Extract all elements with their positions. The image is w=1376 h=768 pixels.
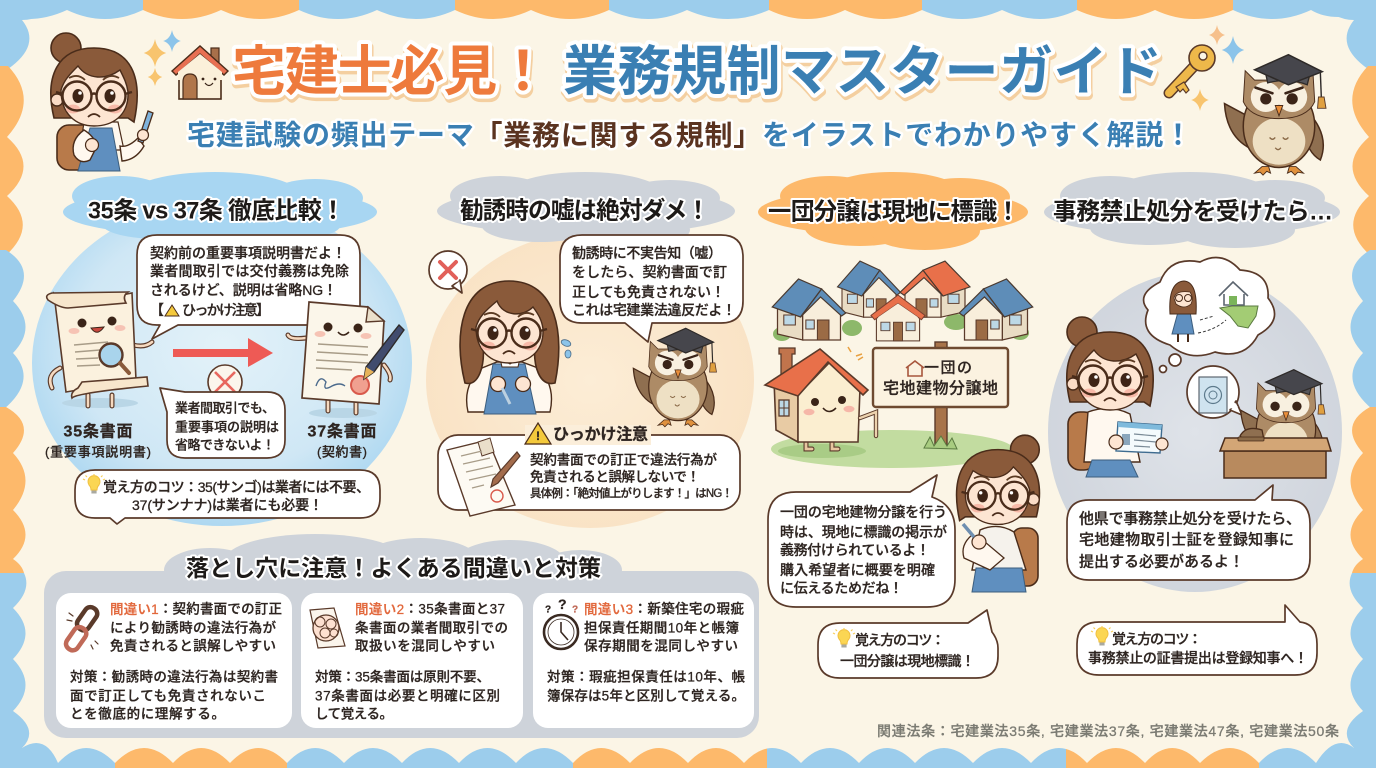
sign: 一団の宅地建物分譲地: 一団の: [924, 360, 972, 376]
card: 間違い2: 取扱いを混同しやすい: [355, 638, 495, 654]
card: 間違い2: して覚える。: [315, 706, 393, 722]
speech bubble: 他県で事務禁止: 他県で事務禁止処分を受けたら、: [1079, 510, 1301, 528]
character: girl reading note: [957, 435, 1039, 592]
title: 宅建士必見！: [233, 45, 551, 105]
heading cloud: [1044, 172, 1340, 248]
warning box: [438, 423, 740, 516]
tip bubble: 一団分譲: 一団分譲は現地標識！: [840, 653, 975, 669]
tip bubble: 事務禁止: [1077, 605, 1317, 675]
speech bubble: 一団の宅地建物分譲: [768, 475, 955, 607]
tip bubble: 覚え方のコツ 35/37: 覚え方のコツ：35(サンゴ)は業者には不要、: [103, 479, 370, 495]
speech bubble: 一団の宅地建物分譲: 義務付けられているよ！: [780, 542, 930, 558]
card: 間違い1: により勧誘時の違法行為が: [110, 620, 276, 636]
icon: broken chain: [64, 605, 100, 653]
card: 間違い3: 間違い3：新築住宅の瑕疵: [584, 600, 744, 616]
title: 業務規制マスターガイド: [564, 45, 1163, 105]
speech bubble: 不実告知: 勧誘時に不実告知（嘘）: [572, 245, 722, 261]
panel background with cloud top: [44, 534, 759, 738]
label: 37条書面: 37条書面: [308, 422, 376, 440]
warning box: !: [536, 429, 540, 443]
icon: tangled documents: [310, 608, 345, 648]
card: 間違い1: とを徹底的に理解する。: [70, 706, 225, 722]
speech bubble: 35条: 契約前の重要事項説明書だよ！: [150, 245, 346, 261]
title: 宅建士必見！: [232, 42, 550, 102]
lawn: [771, 430, 1013, 468]
tip bubble: 覚え方のコツ 35/37: 37(サンナナ)は業者にも必要！: [132, 497, 323, 513]
panel background: [426, 232, 754, 528]
icon: clock with question marks: ?: [545, 604, 551, 616]
speech bubble: 35条: ひっかけ注意】: [182, 302, 270, 318]
card: 間違い1: 免責されると誤解しやすい: [110, 638, 276, 654]
character: girl with pen: [51, 33, 153, 171]
document: 35条 scroll: [47, 292, 152, 408]
tip bubble: 一団分譲: 覚え方のコツ：: [855, 632, 945, 648]
card: 間違い2: [301, 593, 523, 728]
label: 37条書面: (契約書): [317, 444, 367, 460]
heading: 勧誘時の嘘は絶対ダメ！: [460, 196, 710, 224]
label: 35条書面: [45, 422, 151, 460]
panel background: [1048, 272, 1342, 592]
small girl: [1170, 281, 1196, 342]
speech bubble: 業者間取引: [160, 388, 285, 458]
speech bubble: 35条: されるけど、説明は省略NG！: [150, 282, 337, 298]
card: 間違い1: [56, 593, 292, 728]
speech bubble: 他県で事務禁止: 宅地建物取引士証を登録知事に: [1079, 532, 1294, 548]
panel: 事務禁止処分: [1044, 172, 1342, 675]
card: 間違い3: 担保責任期間10年と帳簿: [584, 620, 739, 636]
panel: 一団分譲: [758, 172, 1039, 678]
icon: clock with question marks: ?: [558, 596, 567, 612]
speech bubble: 一団の宅地建物分譲: 一団の宅地建物分譲を行う: [780, 504, 947, 520]
icon: house with face: [172, 46, 228, 99]
heading cloud: [63, 172, 377, 240]
icon: document with stamp: [447, 438, 520, 516]
speech bubble: 他県で事務禁止: 提出する必要があるよ！: [1079, 552, 1244, 570]
character: owl with cap: [1224, 55, 1326, 175]
warning box: 免責されると誤解しないで！: [530, 468, 700, 484]
panel: よくある間違いと対策: [44, 534, 759, 738]
card: 間違い1: 対策：勧誘時の違法行為は契約書: [70, 668, 278, 684]
label: 35条書面: 35条書面: [64, 422, 132, 440]
card: 間違い2: 対策：35条書面は原則不要、: [315, 668, 490, 684]
speech bubble: 35条: 【: [150, 302, 164, 318]
footer: related articles: 関連法条：宅建業法35条, 宅建業法37条, 宅建業法47条, 宅建業法50条: [877, 723, 1339, 739]
speech bubble: 一団の宅地建物分譲: 時は、現地に標識の掲示が: [780, 524, 947, 540]
speech bubble: 不実告知: 正しても免責されない！: [572, 284, 725, 300]
tip bubble: 覚え方のコツ 35/37: [75, 470, 380, 524]
card: 間違い1: 間違い1：契約書面での訂正: [110, 602, 282, 616]
arrow: [173, 338, 273, 367]
icon: key: [1169, 45, 1215, 93]
speech bubble: 不実告知: をしたら、契約書面で訂: [572, 264, 727, 280]
heading cloud: [758, 172, 1028, 250]
speech bubble: 業者間取引: 業者間取引でも、: [175, 400, 275, 416]
label: 37条書面: [308, 422, 376, 460]
map with house: [1220, 306, 1258, 328]
icon: sparkles left: [144, 30, 181, 86]
heading cloud: [437, 172, 735, 247]
sign: 一団の宅地建物分譲地: 宅地建物分譲地: [883, 380, 998, 398]
speech bubble: 35条: 業者間取引では交付義務は免除: [150, 263, 349, 279]
speech bubble: 不実告知: [560, 235, 743, 342]
panel background: [32, 200, 412, 526]
icon: prohibited: [208, 365, 242, 399]
speech bubble: 業者間取引: 重要事項の説明は: [175, 420, 279, 434]
speech bubble: 業者間取引: 省略できないよ！: [175, 438, 275, 452]
tip bubble: 一団分譲: [818, 610, 998, 678]
character: worried girl: [460, 281, 559, 414]
card: 間違い2: 条書面の業者間取引での: [355, 620, 508, 636]
character: girl holding card: [1067, 317, 1168, 477]
warning box: 具体例：「絶対値上がりします！」はNG！: [530, 486, 733, 500]
panel: 勧誘時の嘘: [426, 172, 754, 528]
icon bubble: license document: [1187, 366, 1242, 418]
heading: 一団分譲は現地に標識！: [768, 198, 1020, 226]
thought cloud: [1144, 258, 1275, 372]
card: 間違い3: [533, 593, 754, 728]
speech bubble: 一団の宅地建物分譲: 購入希望者に概要を明確: [780, 562, 935, 578]
icon: clock with question marks: ?: [572, 604, 578, 616]
character: owl lecturing: [633, 328, 716, 427]
icon: clock with question marks: [544, 596, 578, 649]
sign: 一団の宅地建物分譲地: [873, 342, 1008, 449]
title: 業務規制マスターガイド: [563, 42, 1162, 102]
card: 間違い2: 間違い2：35条書面と37: [355, 600, 505, 616]
speech bubble: 35条: [137, 235, 360, 339]
heading: 事務禁止処分を受けたら…: [1053, 198, 1333, 226]
icon: sparkles right: [1191, 25, 1244, 111]
title: [232, 42, 1163, 105]
tip bubble: 事務禁止: 覚え方のコツ：: [1112, 631, 1202, 647]
heading: 35条 vs 37条 徹底比較！: [88, 198, 345, 224]
card: 間違い1: 面で訂正しても免責されないこ: [70, 688, 266, 704]
illustration: house cluster: [772, 261, 1033, 341]
warning box: 契約書面での訂正で違法行為が: [530, 452, 718, 468]
label: 35条書面: (重要事項説明書): [45, 444, 151, 460]
warning box: ひっかけ注意: [553, 426, 648, 444]
card: 間違い3: 保存期間を混同しやすい: [584, 638, 738, 654]
speech bubble: 一団の宅地建物分譲: に伝えるためだね！: [780, 580, 903, 596]
card: 間違い2: 37条書面は必要と明確に区別: [315, 688, 500, 704]
icon: sweat drops: [560, 338, 572, 358]
document: 37条 contract: [288, 302, 404, 418]
icon: red X bubble: [429, 251, 467, 293]
card: 間違い3: 簿保存は5年と区別して覚える。: [547, 688, 745, 704]
character: owl at desk: [1220, 370, 1331, 478]
character: smiling house: [765, 347, 876, 458]
card: 間違い3: 対策：瑕疵担保責任は10年、帳: [547, 668, 746, 684]
license card: [1116, 422, 1162, 453]
heading: 落とし穴に注意！よくある間違いと対策: [186, 555, 601, 581]
tip bubble: 事務禁止: 事務禁止の証書提出は登録知事へ！: [1088, 650, 1308, 666]
speech bubble: 他県で事務禁止: [1067, 485, 1310, 580]
speech bubble: 不実告知: これは宅建業法違反だよ！: [572, 302, 736, 318]
panel: 35条 vs 37条: [32, 172, 412, 526]
subtitle: 宅建試験の頻出テーマ「業務に関する規制」をイラストでわかりやすく解説！: [187, 120, 1192, 150]
